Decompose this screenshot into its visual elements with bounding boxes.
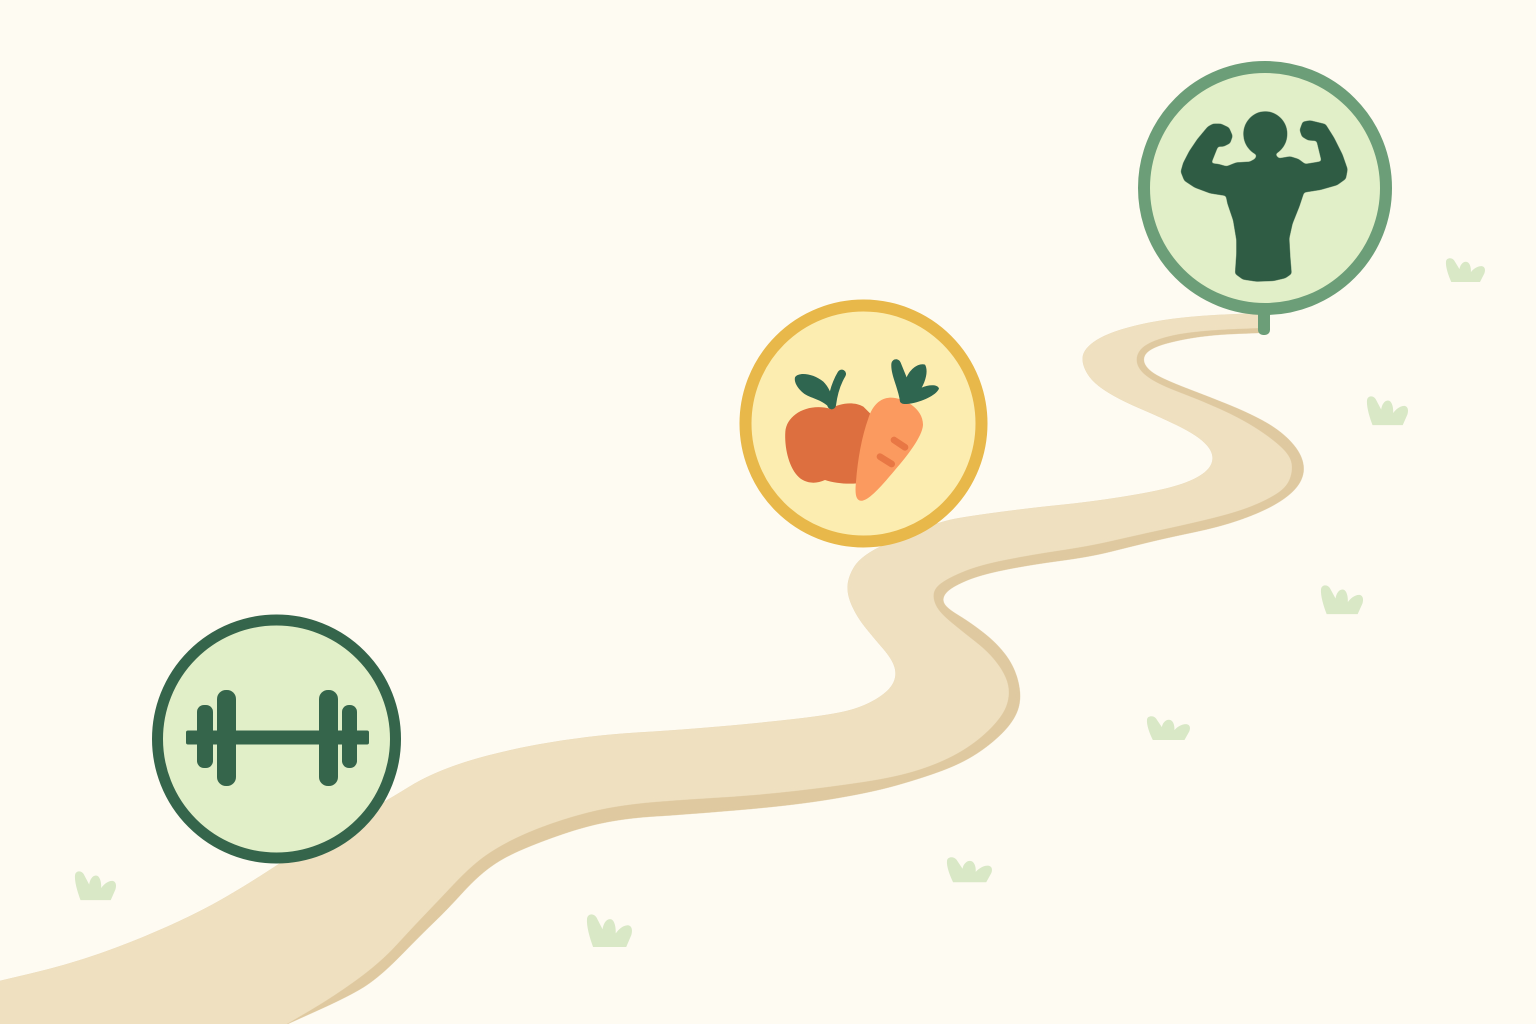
grass tuft 7 bbox=[1446, 258, 1485, 282]
grass tuft 5 bbox=[1321, 585, 1363, 614]
apple bbox=[785, 403, 873, 484]
apple leaf bbox=[795, 374, 842, 407]
carrot stripes bbox=[880, 440, 905, 464]
icon: apple and carrot bbox=[785, 359, 939, 501]
grass tuft 4 bbox=[1147, 716, 1190, 740]
badge circle bbox=[158, 620, 396, 858]
badge circle bbox=[1144, 67, 1386, 309]
grass tuft 3 bbox=[947, 857, 992, 882]
road surface bbox=[0, 313, 1292, 1024]
milestone 2: healthy food bbox=[746, 306, 982, 542]
road edge shadow bbox=[0, 313, 1304, 1024]
carrot leaves bbox=[891, 359, 939, 404]
milestone 1: dumbbell bbox=[158, 620, 396, 858]
signpost stem bbox=[1258, 305, 1270, 335]
winding road bbox=[0, 313, 1304, 1024]
icon: flexing torso bbox=[1182, 112, 1347, 281]
carrot bbox=[856, 398, 923, 501]
grass tuft 6 bbox=[1367, 396, 1408, 425]
grass tuft 1 bbox=[75, 871, 116, 900]
grass tuft 2 bbox=[587, 914, 632, 947]
milestone 3: muscular figure bbox=[1144, 67, 1386, 335]
badge circle bbox=[746, 306, 982, 542]
icon: dumbbell bbox=[186, 690, 369, 786]
